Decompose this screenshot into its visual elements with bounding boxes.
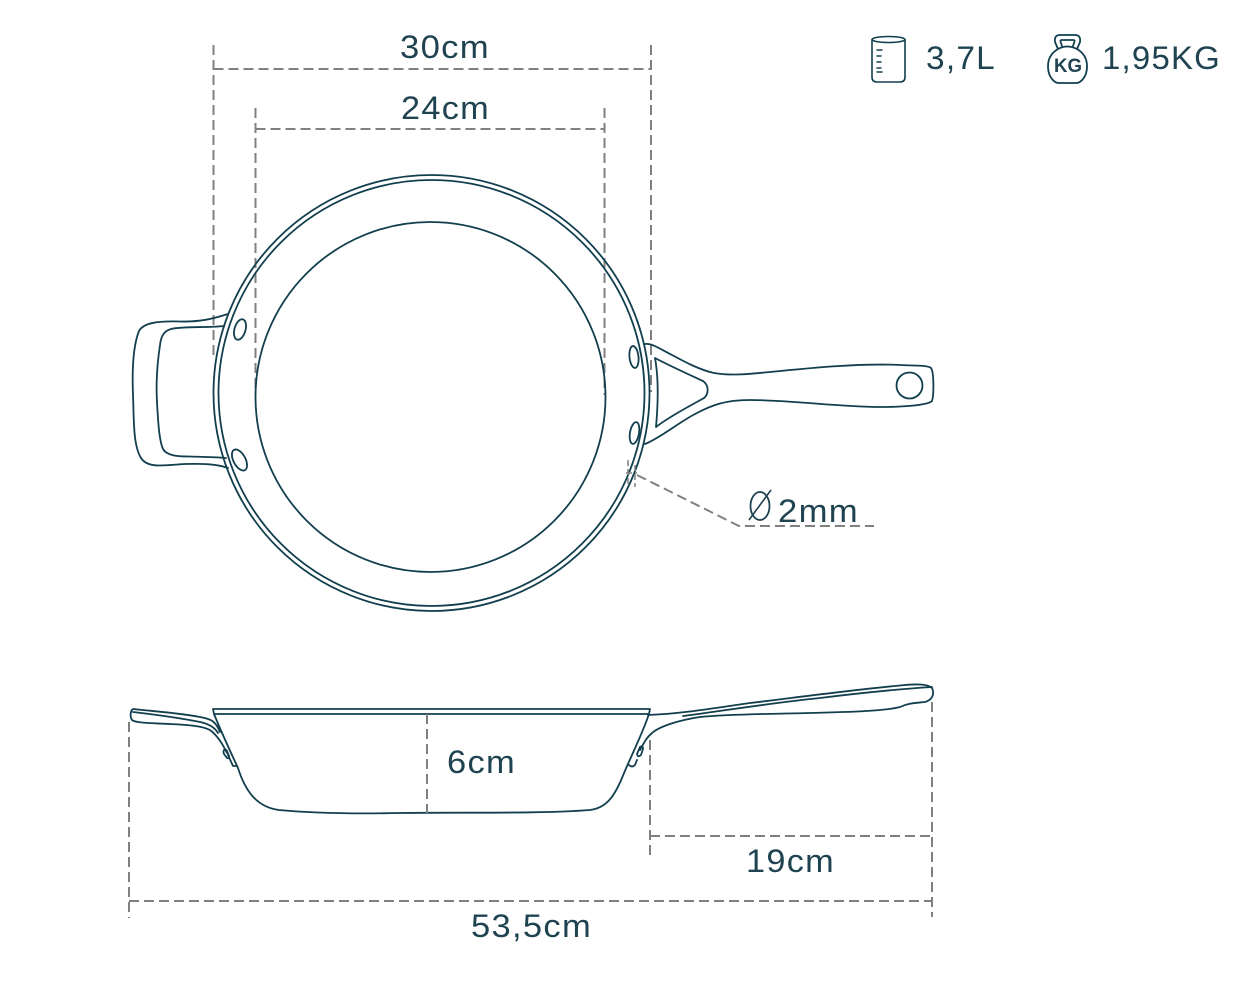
short handle rivets <box>224 750 237 766</box>
dimension: 6cm depth: 6cm <box>447 744 516 780</box>
helper handle top view <box>133 314 250 473</box>
icon: kettlebell weight <box>1048 35 1087 83</box>
long handle rivets <box>629 746 643 766</box>
pan rim and base circles <box>214 175 650 611</box>
weight label: 1,95KG <box>1102 40 1221 76</box>
dimension: 53,5cm total length <box>129 722 932 944</box>
short handle side view <box>131 709 227 753</box>
long handle side view <box>640 684 933 750</box>
icon: measuring cup <box>872 36 905 82</box>
dimension: 19cm handle length <box>650 702 932 917</box>
capacity label: 3,7L <box>926 40 996 76</box>
icon: kettlebell weight: KG <box>1054 56 1082 77</box>
dimension: 24cm inner diameter <box>256 90 604 395</box>
dimension: 2mm wall thickness <box>626 460 874 529</box>
dimension: 24cm inner diameter: 24cm <box>401 90 490 126</box>
top view of pan <box>133 175 933 611</box>
side view of pan <box>131 684 933 813</box>
dimension: 2mm wall thickness: 2mm <box>778 493 859 529</box>
long handle top view <box>628 344 933 445</box>
dimension: 6cm depth <box>427 714 516 813</box>
pan body side view <box>213 709 650 813</box>
dimension: 30cm outer diameter <box>214 29 651 392</box>
dimension: 30cm outer diameter: 30cm <box>400 29 490 65</box>
dimension: 19cm handle length: 19cm <box>746 843 835 879</box>
dimension: 53,5cm total length: 53,5cm <box>471 908 592 944</box>
